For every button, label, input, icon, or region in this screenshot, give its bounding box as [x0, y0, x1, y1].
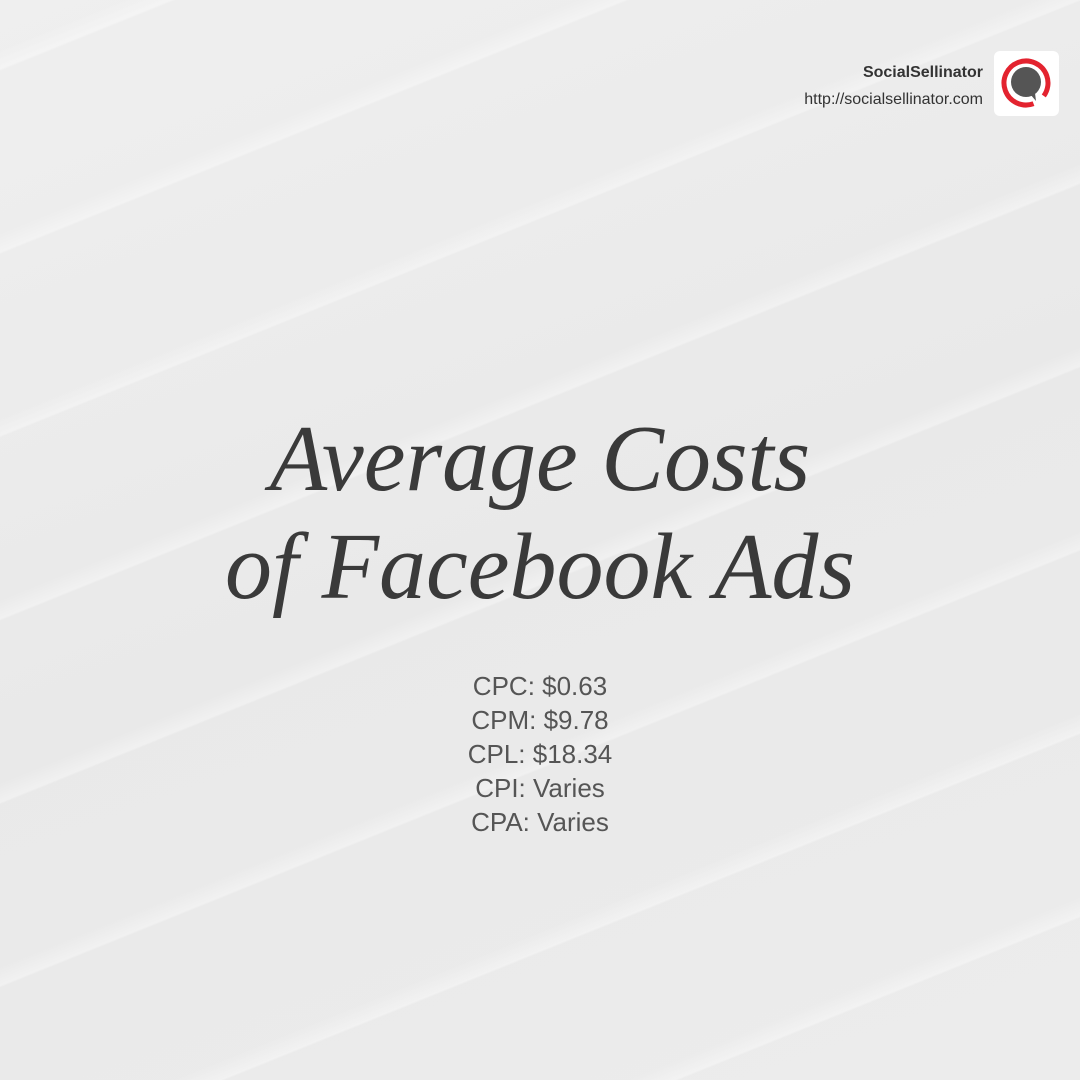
brand text: http://socialsellinator.com [804, 91, 983, 108]
title: Average Costs [270, 407, 810, 511]
stats list: CPC: $0.63 [473, 671, 607, 701]
brand text [804, 64, 983, 108]
title [225, 407, 855, 619]
stats list [468, 671, 612, 837]
stats list: CPA: Varies [471, 807, 609, 837]
icon: logo [994, 51, 1059, 116]
stats list: CPL: $18.34 [468, 739, 612, 769]
stats list: CPI: Varies [475, 773, 605, 803]
brand text: SocialSellinator [863, 64, 983, 81]
stats list: CPM: $9.78 [471, 705, 609, 735]
title: of Facebook Ads [225, 515, 855, 619]
